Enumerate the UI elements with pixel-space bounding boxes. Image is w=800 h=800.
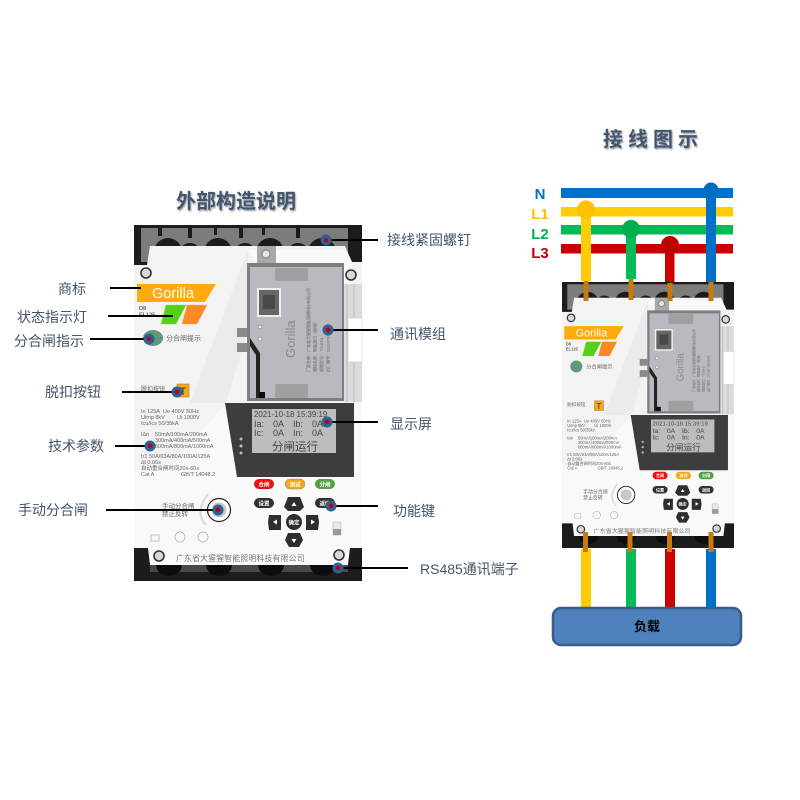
LCD screen: Ic: [254,428,264,438]
toggle switch [712,504,718,514]
trip button [567,401,603,411]
leader: 通讯模组: 通讯模组 [390,326,446,342]
leader: 手动分合闸 [18,502,224,518]
function keys: 确定 [288,518,300,526]
open-close indicator [143,330,201,346]
icon: screws [141,268,356,561]
logo banner: Gorilla [152,286,195,302]
LCD screen: 0A [667,435,676,442]
LCD screen: 分闸运行 [272,440,318,454]
technical parameters: Cat A [567,466,578,471]
leader: 显示屏: 显示屏 [390,416,432,432]
technical parameters: 50A/63A/80A/100A/125A [149,454,210,460]
leader: RS485通讯端子: RS485通讯端子 [420,561,519,577]
top terminal block [567,284,723,310]
bottom terminal block [562,523,734,548]
technical parameters: ∆t 0.06s [567,457,582,462]
top terminal block [141,228,348,262]
technical parameters: Uimp 8kV [141,415,165,421]
LCD screen: 0A [696,428,705,435]
icon: mounting screw plate [655,298,669,311]
LCD screen: 0A [273,419,284,429]
function keys: 设置 [656,486,664,492]
side rail [344,284,362,402]
leader: RS485通讯端子 [332,561,519,577]
technical parameters: ∆t 0.06s [141,460,161,466]
network module: Gorilla [675,353,686,381]
technical parameters: 300mA/400mA/500mA [155,438,211,444]
LCD screen: 2021-10-18 15:39:19 [254,410,328,419]
LCD screen: 0A [312,419,323,429]
small marks [575,511,618,519]
network module: 出厂编号：0119070200006 [705,355,710,392]
manual switch [162,494,230,525]
manual switch: 手动分合闸 [162,503,194,510]
leader: 商标 [58,281,141,297]
technical parameters: 600mA/800mA/1000mA [155,444,214,450]
function keys [254,479,335,547]
logo banner: Gorilla [576,328,608,340]
LCD screen: Ib: [293,419,303,429]
network module: 规格型号：TC02H1 [701,365,706,392]
technical parameters: Ue 400V [584,418,600,423]
wiring: drop lines [577,182,718,283]
panel: wiring device [562,282,734,548]
LCD screen: 0A [667,428,676,435]
technical parameters: 50mA/100mA/200mA [155,432,208,438]
LCD screen: In: [293,428,303,438]
manual switch: 手动分合闸 [583,490,608,495]
network module: 厂家名称：广东省大猩猩智能照明科技有限公司 [306,288,311,372]
wiring: top copper connectors [584,279,714,301]
manual switch: 禁止反转 [162,509,188,518]
leader: 商标: 商标 [58,281,86,297]
model text: EL125 [566,346,579,351]
device body [562,282,734,548]
technical parameters: Uimp 8kV [567,423,585,428]
LCD screen [651,419,714,452]
side clip [237,328,247,352]
leader: 功能键 [326,500,435,519]
technical parameters: GB/T 14048.2 [597,466,624,471]
technical parameters: I∆n [567,436,574,441]
function keys: 返回 [702,486,710,492]
load box [553,608,741,645]
network module [647,310,720,414]
leader: 手动分合闸: 手动分合闸 [18,502,88,518]
technical parameters: Cat A [141,472,155,478]
network module: Gorilla [283,320,298,358]
technical parameters: 自动重合闸时间20s-60s [141,464,199,472]
network module: 模块名称：物联通讯（插电） [312,320,318,372]
toggle switch [333,522,341,535]
company name: 广东省大猩猩智能照明科技有限公司 [594,527,691,535]
leader: 脱扣按钮 [45,384,182,400]
icon: screws [567,314,729,533]
title: 接线图示: 接线图示 [603,128,703,151]
leader: 功能键: 功能键 [393,503,435,519]
trip button: T [180,386,187,398]
leader: 通讯模组 [322,324,446,342]
icon: mounting screw plate [257,246,276,264]
LCD screen: 分闸运行 [666,442,701,452]
leader: 显示屏 [322,416,432,432]
technical parameters: Ui 1000V [177,415,200,421]
function keys: 设置 [258,499,270,507]
technical parameters: 50mA/100mA/200mA [578,436,617,441]
LCD screen: Ia: [653,428,660,435]
LCD screen: 2021-10-18 15:39:19 [653,421,708,427]
technical parameters: 600mA/800mA/1000mA [578,445,622,450]
panel: main device [134,225,362,581]
leader: 状态指示灯: 状态指示灯 [17,309,87,325]
function keys: 返回 [319,499,331,507]
title: 外部构造说明: 外部构造说明 [176,190,296,213]
white face plate [562,298,734,536]
technical parameters: I∆n [141,432,149,438]
LCD screen: Ib: [682,428,690,435]
wiring: phase labels [531,186,549,262]
logo banner [137,284,216,302]
technical parameters: Ui 1000V [594,423,612,428]
leader: 技术参数 [48,438,156,454]
network module: 规格型号：TC02H1 [318,336,324,372]
manual switch: 禁止反转 [583,494,603,501]
function keys [653,472,714,523]
LCD screen: 0A [696,435,705,442]
manual switch [583,483,635,506]
model text: D8 [139,306,146,312]
leader: 分合闸指示 [14,333,154,349]
status indicator lights [161,305,207,324]
network module: 模块名称：物联通讯（插电） [696,353,701,392]
leader: 技术参数: 技术参数 [48,438,104,454]
technical parameters: 50A/63A/80A/100A/125A [573,452,619,457]
bottom terminal block [134,548,362,581]
wiring: bottom copper connectors [583,532,714,552]
open-close indicator: 分合闸提示 [586,362,613,370]
trip button: 脱扣按钮 [567,401,586,408]
LCD screen: Ic: [653,435,660,442]
trip button [141,384,189,398]
technical parameters: In 125A [567,418,582,423]
function keys: 测试 [289,480,301,488]
technical parameters: Icu/Ics 50/35kA [141,421,179,427]
LCD screen: 0A [312,428,323,438]
logo banner [564,326,624,340]
wiring: lower wires [581,549,716,608]
wiring: phase labels: L3 [531,245,549,262]
technical parameters: 50Hz [186,409,199,415]
function keys: 分闸 [319,480,331,488]
network module: 厂家名称：广东省大猩猩智能照明科技有限公司 [692,329,696,392]
side clip [640,359,647,377]
trip button: 脱扣按钮 [141,385,165,393]
leader: 分合闸指示: 分合闸指示 [14,333,84,349]
technical parameters: 300mA/400mA/500mA [578,440,620,445]
function keys: 测试 [679,472,688,478]
LCD screen: In: [682,435,690,442]
wiring: bus bars [561,188,733,254]
technical parameters: GB/T 14048.2 [181,472,215,478]
model text: EL125 [139,312,155,318]
LCD screen: Ia: [254,419,264,429]
technical parameters: Ue 400V [163,409,185,415]
function keys: 合闸 [656,472,664,478]
open-close indicator [570,360,613,372]
wiring: phase labels: N [535,186,545,203]
technical parameters: Ir1 [567,452,573,457]
side rail [720,326,734,414]
function keys: 确定 [679,501,687,507]
leader: 脱扣按钮: 脱扣按钮 [45,384,101,400]
technical parameters: Icu/Ics 50/35kA [567,427,596,432]
white face plate [134,246,362,565]
wiring: phase labels: L1 [531,206,549,223]
company name: 广东省大猩猩智能照明科技有限公司 [176,553,305,563]
network module [247,263,344,401]
technical parameters: In 125A [141,409,160,415]
LCD screen [252,409,336,454]
leader: 接线紧固螺钉: 接线紧固螺钉 [387,232,471,248]
wiring: phase labels: L2 [531,226,549,243]
display panel [631,415,728,470]
function keys: 合闸 [258,480,270,488]
LCD screen: 0A [273,428,284,438]
device body [134,225,362,581]
function keys: 分闸 [702,472,710,478]
network module: 出厂编号：0119070200006 [324,323,330,372]
open-close indicator: 分合闸提示 [166,334,201,342]
load box: 负载 [634,619,660,634]
trip button: T [596,402,602,411]
display panel [225,403,354,477]
model text: D8 [566,342,571,347]
status indicator lights [582,342,617,356]
technical parameters: 自动重合闸时间20s-60s [567,460,611,466]
leader: 接线紧固螺钉 [320,232,471,248]
small marks [151,532,208,542]
technical parameters: Ir1 [141,454,147,460]
technical parameters: 50Hz [601,418,611,423]
